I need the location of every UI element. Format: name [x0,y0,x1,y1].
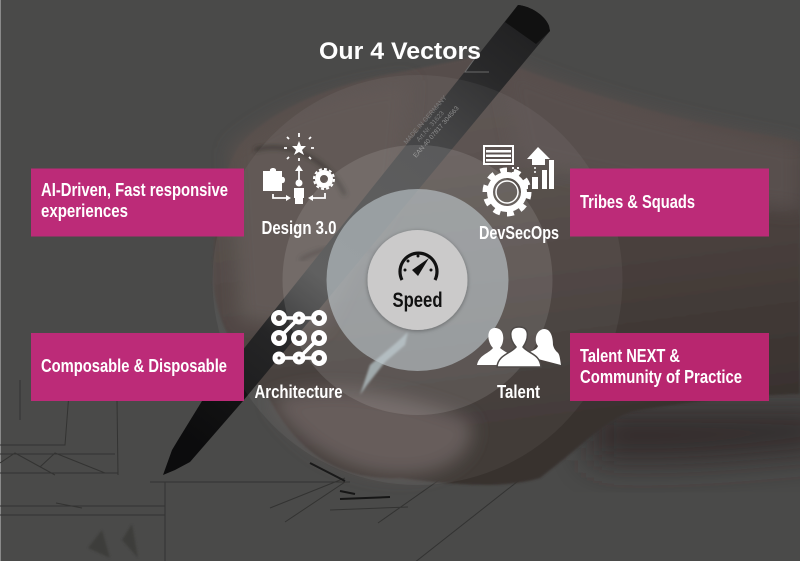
icon: design 3.0 [263,133,334,204]
panel: Talent NEXT callout: Talent NEXT & [580,346,680,366]
background photo: hand drawing with pen: Art.Nr. 31623 [415,110,446,143]
background photo: hand drawing with pen: EAN 40 07817 304563 [412,105,461,159]
panel: Talent NEXT callout [570,333,769,401]
label: Design 3.0: Design 3.0 [262,218,336,238]
panel: Composable callout: Composable & Disposable [41,356,227,376]
label: DevSecOps: DevSecOps [479,223,559,243]
hand [213,55,800,485]
icon: DevSecOps [484,146,554,214]
title: Our 4 Vectors [319,38,481,65]
panel: AI-Driven callout: experiences [41,201,128,221]
panel: AI-Driven callout: AI-Driven, Fast responsive [41,180,228,200]
icon: architecture [274,312,324,364]
icon: speedometer [400,253,437,280]
panel: Tribes and Squads callout [570,168,769,236]
panel: Composable callout [31,333,244,401]
label: Speed: Speed [392,289,442,312]
highlight streak [360,332,408,395]
panel: Talent NEXT callout: Community of Practice [580,367,742,387]
sketch lines [0,380,560,561]
icon: talent people [477,327,561,367]
label: Talent: Talent [497,382,540,402]
background photo: hand drawing with pen: MADE IN GERMANY [403,94,449,146]
panel: Tribes and Squads callout: Tribes & Squads [580,192,695,212]
pen [163,5,550,475]
label: Architecture: Architecture [254,382,342,402]
concentric circles [212,75,622,485]
panel: AI-Driven callout [31,168,244,236]
